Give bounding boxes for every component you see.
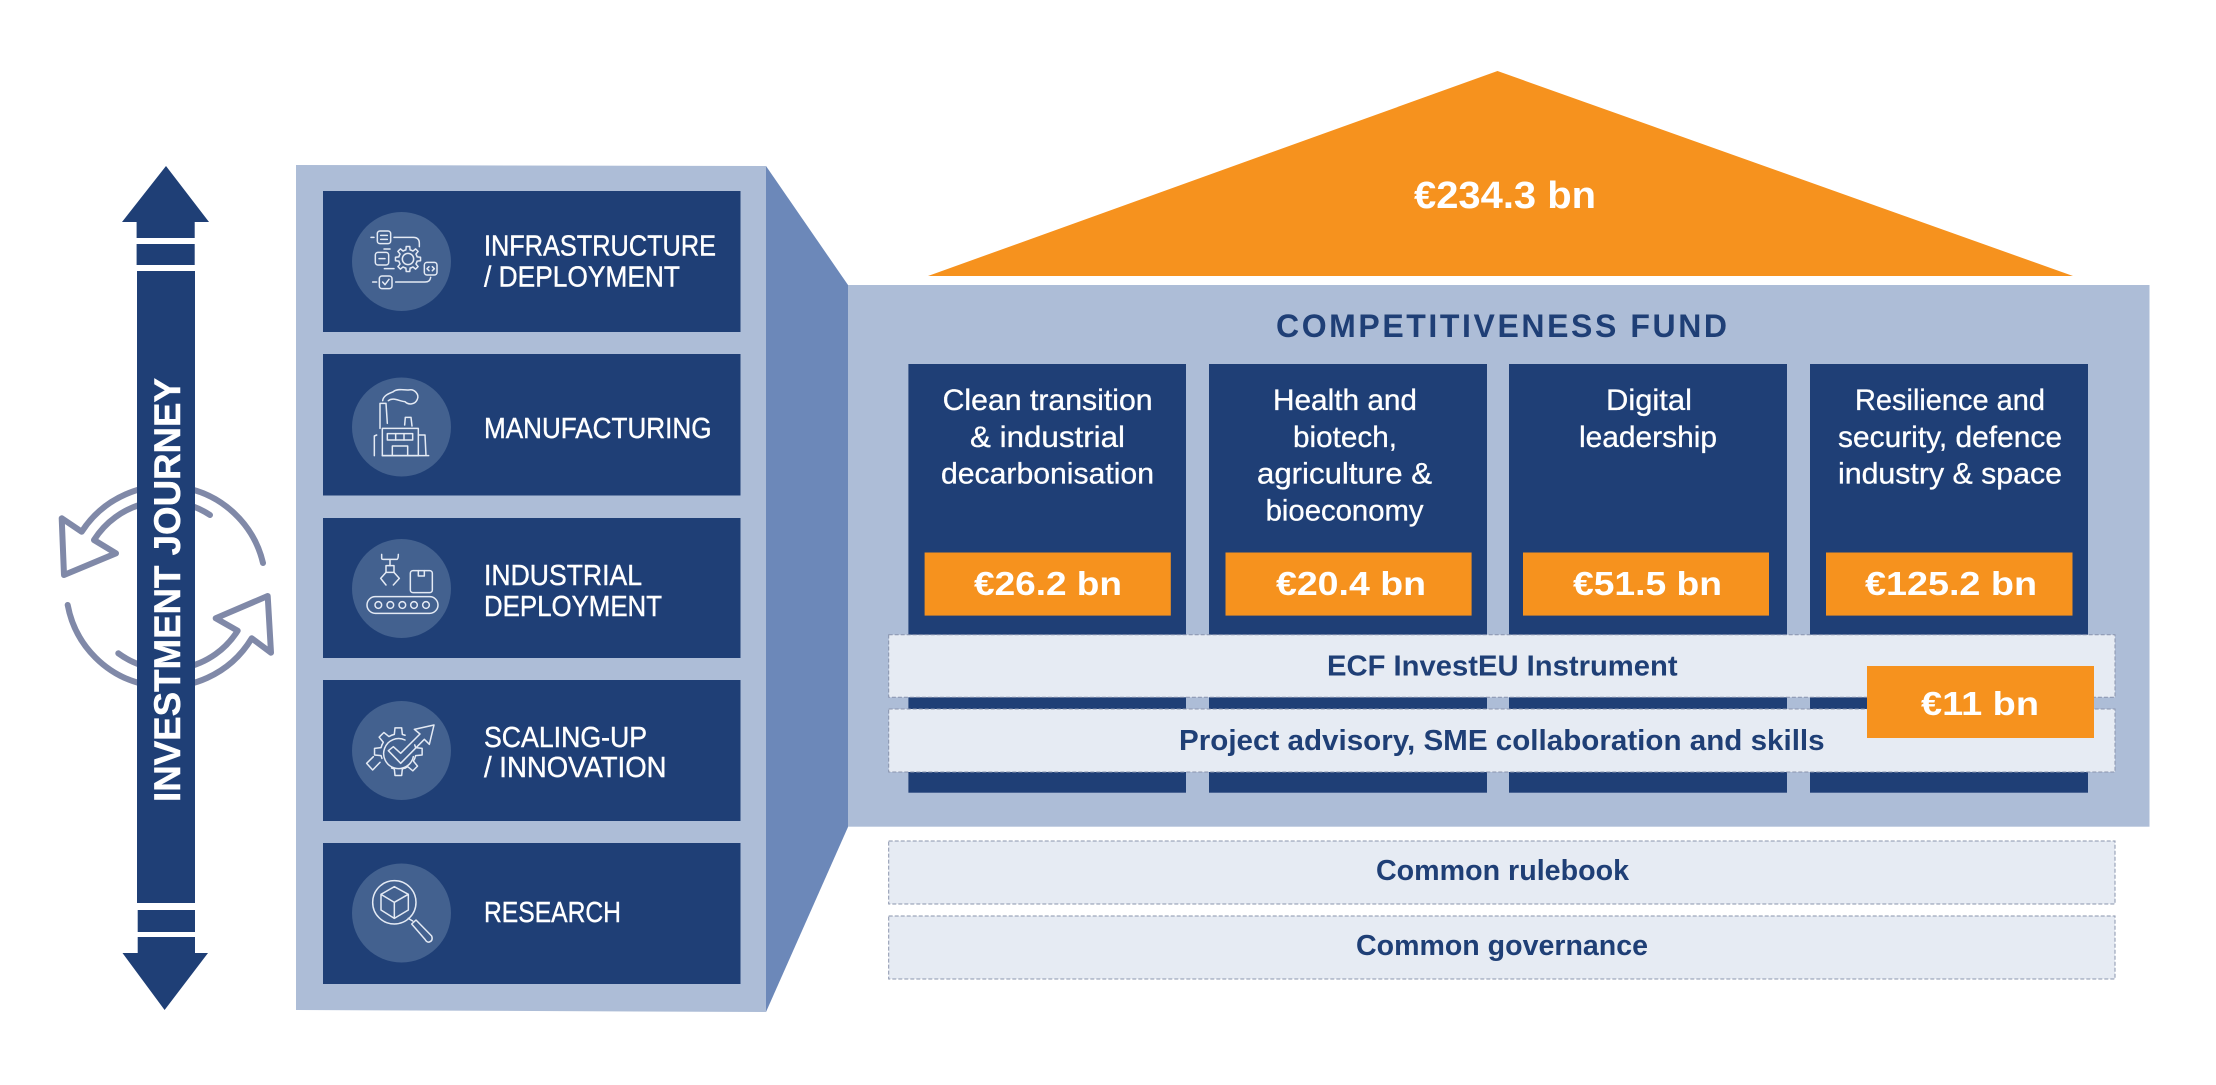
label: industrial deployment: INDUSTRIAL (484, 560, 642, 592)
roof: total amount triangle (928, 71, 2073, 276)
bar: common rulebook (889, 841, 2115, 904)
label: infrastructure / deployment: INFRASTRUCTURE (484, 230, 716, 262)
heading: investment journey: INVESTMENT JOURNEY (146, 378, 188, 802)
label: scaling-up / innovation (484, 722, 666, 784)
row: manufacturing (323, 354, 740, 496)
bar: project advisory (889, 709, 2115, 772)
column: health and biotech (1209, 364, 1487, 793)
arrow: investment journey double arrow (122, 166, 209, 1010)
column: health and biotech: bioeconomy (1266, 495, 1424, 528)
callout: 11 bn (1867, 666, 2094, 738)
column: resilience and security: security, defence (1838, 421, 2062, 454)
column: health and biotech: biotech, (1293, 421, 1397, 454)
column: clean transition: Clean transition (943, 384, 1153, 417)
icon: robotic arm and conveyor (367, 554, 438, 613)
column: digital leadership: Digital (1606, 384, 1692, 417)
column: health and biotech: €20.4 bn (1276, 565, 1426, 602)
connector wedge (766, 166, 848, 1012)
column: resilience and security: industry & space (1838, 458, 2062, 491)
column: clean transition: €26.2 bn (974, 565, 1122, 602)
bar: ECF InvestEU Instrument: ECF InvestEU Instrument (1327, 651, 1678, 683)
heading: competitiveness fund: COMPETITIVENESS FUND (1276, 308, 1727, 344)
total value: €234.3 bn (1414, 175, 1596, 217)
column: resilience and security: €125.2 bn (1865, 565, 2037, 602)
row: research (323, 843, 740, 984)
column: health and biotech: Health and (1273, 384, 1417, 417)
label: industrial deployment: DEPLOYMENT (484, 591, 662, 623)
column: resilience and security: Resilience and (1855, 384, 2045, 417)
bar: ECF InvestEU Instrument (889, 635, 2115, 697)
icon: factory (374, 390, 429, 456)
column: resilience and security (1810, 364, 2088, 793)
label: infrastructure / deployment (484, 230, 716, 294)
bar: common governance: Common governance (1356, 930, 1648, 962)
label: manufacturing: MANUFACTURING (484, 413, 712, 445)
column: health and biotech: agriculture & (1257, 458, 1432, 491)
row: industrial deployment (323, 518, 740, 658)
label: research: RESEARCH (484, 897, 621, 929)
bar: common governance (889, 916, 2115, 979)
icon: circular cycle arrows (62, 486, 271, 687)
bar: project advisory: Project advisory, SME collaboration and skills (1179, 725, 1825, 757)
icon: gear with rising arrow (367, 725, 434, 775)
panel: competitiveness fund (848, 285, 2150, 827)
column: digital leadership: leadership (1579, 421, 1717, 454)
bar: common rulebook: Common rulebook (1376, 855, 1630, 887)
row: infrastructure / deployment (323, 191, 740, 332)
column: digital leadership: €51.5 bn (1573, 565, 1722, 602)
column: clean transition: & industrial (970, 421, 1125, 454)
column: digital leadership (1509, 364, 1787, 793)
label: industrial deployment (484, 560, 662, 623)
row: scaling-up / innovation (323, 680, 740, 821)
icon: magnifier over cube (373, 881, 432, 942)
column: clean transition (908, 364, 1186, 793)
panel background (296, 165, 766, 1012)
column: clean transition: decarbonisation (941, 458, 1154, 491)
label: scaling-up / innovation: SCALING-UP (484, 722, 647, 754)
callout: 11 bn: €11 bn (1921, 685, 2039, 722)
panel: investment stages (296, 165, 848, 1012)
icon: process gear (371, 231, 437, 289)
label: scaling-up / innovation: / INNOVATION (484, 752, 666, 784)
label: infrastructure / deployment: / DEPLOYMENT (484, 262, 680, 294)
